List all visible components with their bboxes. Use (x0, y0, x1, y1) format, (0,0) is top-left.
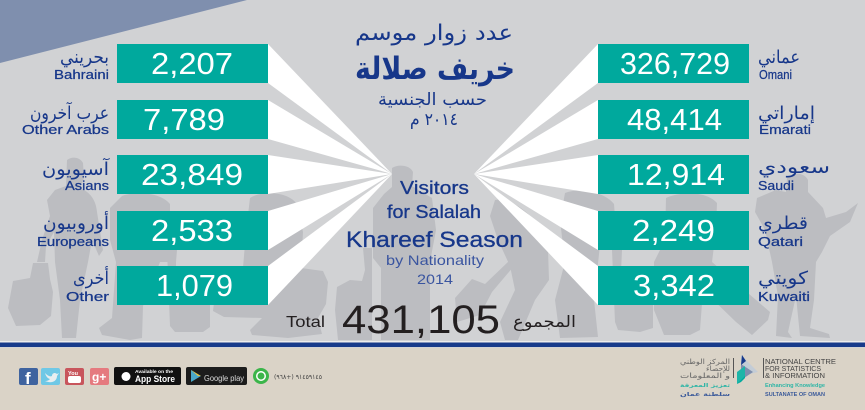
label: Qatari: Qatari (758, 234, 803, 249)
label: Bahraini (54, 47, 109, 82)
label: Other Arabs: عرب آخرون (30, 101, 109, 124)
title: Arabic heading: ٢٠١٤ م (410, 110, 458, 130)
label: Other (66, 266, 110, 304)
bar: Kuwaiti 3,342: 3,342 (633, 268, 715, 303)
label: Asians: Asians (65, 178, 110, 193)
title: English heading: by Nationality (386, 252, 484, 268)
social icons (19, 368, 109, 388)
total figure: Total (286, 314, 325, 331)
title: English heading: 2014 (417, 271, 453, 287)
bar: Other Arabs 7,789 (117, 100, 268, 139)
label: Asians (42, 157, 110, 193)
logo English name: FOR STATISTICS (765, 366, 821, 373)
rays: left fan (268, 44, 392, 305)
logo taglines (680, 383, 825, 398)
badge: Google Play (186, 367, 247, 385)
footer band (0, 348, 865, 410)
logo Arabic name (680, 358, 730, 380)
label: Other Arabs (22, 101, 110, 137)
silhouette: fourth right traveller (555, 190, 616, 338)
label: Emarati: إماراتي (758, 103, 815, 124)
label: Kuwaiti: Kuwaiti (758, 289, 810, 304)
label: Saudi: سعودي (758, 157, 830, 178)
badge: App Store (114, 367, 181, 385)
label: Omani: عماني (758, 47, 800, 68)
title: Arabic heading: عدد زوار موسم (355, 21, 513, 46)
panel: left nationality bars (117, 44, 268, 305)
logo Arabic name: المركز الوطني (680, 358, 730, 366)
silhouette: third traveller and duffel bag (213, 193, 328, 338)
top-left blue corner (0, 0, 247, 63)
label: Omani (758, 47, 800, 82)
label: Europeans (37, 211, 110, 249)
label: Bahraini: Bahraini (54, 67, 109, 82)
logo dividers (733, 358, 764, 378)
label: Europeans: Europeans (37, 234, 110, 249)
logo English name: NATIONAL CENTRE (765, 359, 836, 366)
label: Kuwaiti: كويتي (758, 268, 808, 289)
title: Arabic heading: خريف صلالة (355, 51, 515, 87)
logo Arabic name: و المعلومات (680, 372, 730, 380)
title: English heading (346, 178, 523, 287)
logo taglines: Enhancing Knowledge (765, 383, 825, 389)
icon: Facebook: f (25, 369, 31, 388)
label: Bahraini: بحريني (60, 47, 109, 68)
bar: Qatari 2,249 (598, 211, 749, 250)
silhouette: right traveller (654, 193, 770, 335)
icon: Google Plus: g+ (92, 370, 106, 384)
ray: Bahraini (268, 44, 392, 174)
bar: Saudi 12,914: 12,914 (627, 157, 725, 192)
bar: Saudi 12,914 (598, 155, 749, 194)
label: Qatari: قطري (758, 213, 808, 234)
bar: Omani 326,729: 326,729 (620, 46, 730, 81)
label: Other Arabs: Other Arabs (22, 122, 110, 137)
bar: Bahraini 2,207 (117, 44, 268, 83)
silhouette: second traveller (99, 193, 170, 340)
silhouette: tall suitcase with handle (167, 250, 210, 332)
bar: Europeans 2,533 (117, 211, 268, 250)
phone number: (٩٦٨+) ٩١٤٥٩١٤٥ (274, 373, 322, 381)
ray: Asians (268, 155, 392, 194)
bar: Emarati 48,414 (598, 100, 749, 139)
logo taglines: سلطنة عمان (680, 392, 730, 398)
icon: YouTube: You (68, 371, 78, 377)
bar: Other Arabs 7,789: 7,789 (143, 102, 225, 137)
total figure: المجموع (513, 312, 576, 332)
icon: Twitter (41, 368, 60, 385)
total figure: 431,105 (342, 298, 500, 342)
bar: Other 1,079 (117, 266, 268, 305)
label: Kuwaiti (758, 268, 810, 304)
rays: right fan (474, 44, 598, 305)
ray: Kuwaiti (474, 174, 598, 305)
right labels (758, 47, 830, 304)
title: Arabic heading (355, 21, 515, 130)
silhouette: tilted suitcase (455, 260, 514, 322)
bar: Asians 23,849: 23,849 (141, 157, 243, 192)
silhouette: central traveller with handle (373, 166, 436, 340)
bar: Europeans 2,533: 2,533 (151, 213, 233, 248)
bar: Other 1,079: 1,079 (156, 268, 233, 303)
silhouette: far-left suitcase (8, 263, 53, 326)
silhouette: soldier figure, far right (755, 174, 858, 338)
left labels (22, 47, 110, 304)
silhouette: traveller with wheeled case, far left (37, 158, 103, 338)
logo Arabic name: للإحصاء (706, 365, 730, 373)
traveller silhouettes (8, 158, 858, 340)
title: Arabic heading: حسب الجنسية (378, 90, 487, 110)
bar: Bahraini 2,207: 2,207 (151, 46, 233, 81)
label: Emarati (758, 103, 815, 137)
ray: Other (268, 174, 392, 305)
label: Other: أخرى (73, 266, 109, 289)
label: Omani: Omani (759, 67, 792, 82)
ray: Qatari (474, 174, 598, 250)
silhouette: traveller pulling tilted suitcase (490, 200, 549, 340)
logo taglines: SULTANATE OF OMAN (765, 392, 825, 398)
badge: App Store: Available on the (135, 369, 174, 374)
ray: Other Arabs (268, 100, 392, 174)
bar: Emarati 48,414: 48,414 (627, 102, 722, 137)
label: Emarati: Emarati (759, 122, 811, 137)
ray: Emarati (474, 100, 598, 174)
badge: Google Play: Google play (204, 373, 245, 383)
ray: Omani (474, 44, 598, 174)
silhouette: centre bag and handle (335, 248, 372, 340)
logo English name: & INFORMATION (765, 373, 825, 380)
badge: App Store: App Store (135, 374, 175, 384)
footer blue rule (0, 341, 865, 347)
label: Qatari (758, 213, 808, 249)
logo taglines: تعزيز المعرفة (680, 383, 730, 389)
silhouette: right suitcase with handle (612, 250, 653, 332)
bar: Kuwaiti 3,342 (598, 266, 749, 305)
label: Saudi: Saudi (758, 178, 794, 193)
panel: right nationality bars (598, 44, 749, 305)
icon: WhatsApp (253, 368, 269, 384)
bar: Qatari 2,249: 2,249 (632, 213, 715, 248)
label: Other: Other (66, 289, 110, 304)
label: Asians: آسيويون (42, 157, 110, 180)
bar: Omani 326,729 (598, 44, 749, 83)
title: English heading: for Salalah (387, 202, 481, 222)
label: Europeans: أوروبيون (43, 211, 109, 234)
total figure (286, 298, 576, 342)
title: English heading: Khareef Season (346, 227, 523, 252)
logo mark (737, 355, 758, 384)
ray: Europeans (268, 174, 392, 250)
logo English name (765, 359, 836, 380)
title: English heading: Visitors (400, 178, 469, 198)
logo: National Centre for Statistics and Information (680, 355, 836, 398)
bar: Asians 23,849 (117, 155, 268, 194)
ray: Saudi (474, 155, 598, 194)
label: Saudi (758, 157, 830, 193)
